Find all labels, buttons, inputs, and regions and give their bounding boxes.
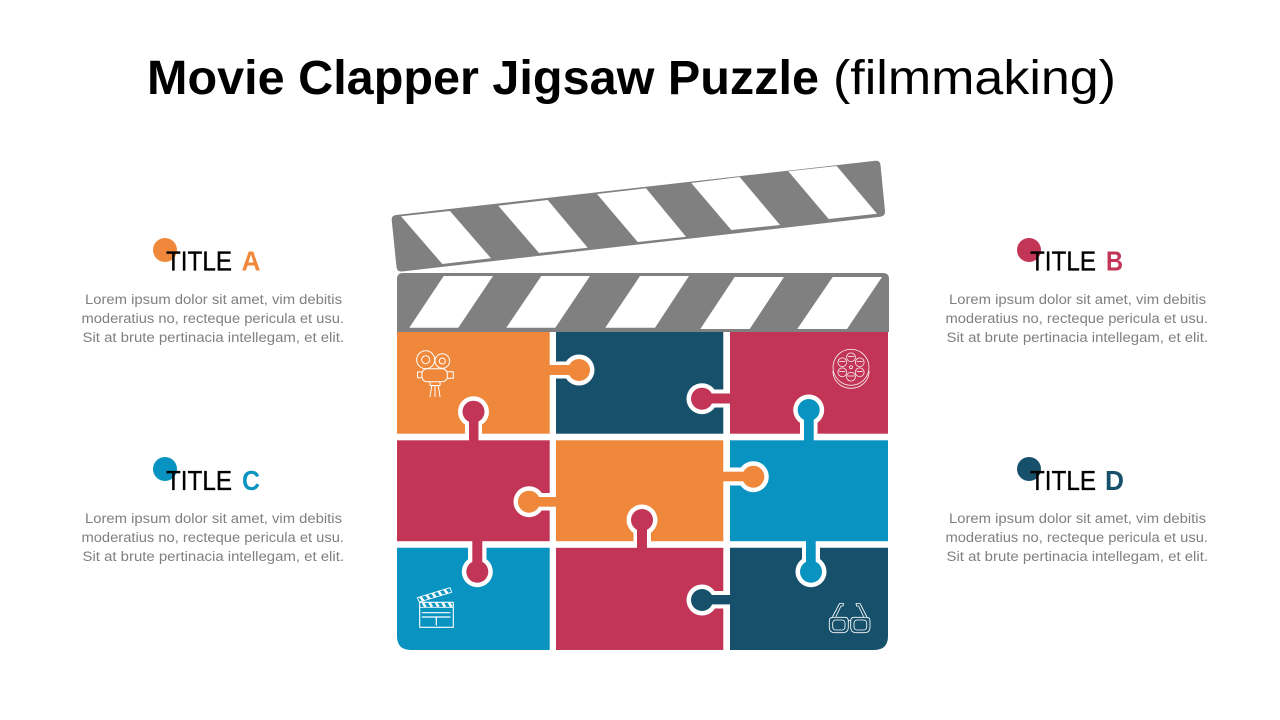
connector: crimson tab into orange	[458, 396, 489, 441]
puzzle piece: row 3 column 3 navy	[730, 548, 888, 650]
puzzle piece: row 1 column 2 navy	[556, 332, 723, 434]
panel: title C	[82, 457, 344, 564]
puzzle piece: row 3 column 1 blue	[397, 548, 550, 650]
heading A: TITLE	[166, 246, 232, 276]
clapper top arm	[392, 161, 885, 272]
jigsaw puzzle board	[397, 332, 888, 650]
puzzle piece: row 3 column 2 crimson	[556, 548, 723, 650]
connector: crimson tab into navy	[686, 383, 731, 414]
body text C	[82, 511, 344, 564]
body text A	[82, 292, 344, 345]
body text A: Sit at brute pertinacia intellegam, et elit.	[82, 330, 344, 345]
title: Movie Clapper Jigsaw Puzzle	[147, 52, 819, 105]
puzzle piece: row 1 column 3 crimson	[730, 332, 888, 434]
heading C: TITLE	[166, 465, 232, 496]
connector: crimson tab into orange centre	[626, 504, 658, 549]
body text C: Lorem ipsum dolor sit amet, vim debitis	[85, 511, 342, 526]
heading A: A	[242, 246, 261, 276]
icon: movie camera	[417, 351, 453, 397]
heading C: C	[242, 465, 260, 496]
connector: blue tab into crimson	[793, 394, 824, 441]
marker dot A	[153, 238, 177, 262]
clapper striped bar	[397, 273, 889, 332]
connector: orange tab into navy	[549, 354, 594, 386]
heading B: TITLE	[1030, 246, 1096, 276]
icon: film reel	[833, 349, 869, 388]
body text A: Lorem ipsum dolor sit amet, vim debitis	[85, 292, 342, 307]
icon: clapperboard	[417, 588, 453, 627]
body text D: Sit at brute pertinacia intellegam, et elit.	[946, 549, 1208, 564]
connector: navy tab into crimson	[686, 584, 731, 616]
puzzle piece: row 2 column 2 orange	[556, 440, 723, 541]
panel: title A	[82, 238, 344, 345]
marker dot D	[1017, 457, 1041, 481]
body text D: Lorem ipsum dolor sit amet, vim debitis	[949, 511, 1206, 526]
marker dot B	[1017, 238, 1041, 262]
connector: orange tab into blue	[723, 461, 769, 492]
panel: title B	[946, 238, 1208, 345]
body text B	[946, 292, 1208, 345]
body text C: moderatius no, recteque pericula et usu.	[82, 530, 344, 545]
heading D: D	[1105, 465, 1124, 496]
connector: orange tab into crimson	[514, 486, 557, 517]
heading B: B	[1106, 246, 1123, 276]
body text B: Sit at brute pertinacia intellegam, et elit.	[946, 330, 1208, 345]
connector: blue tab into navy	[796, 540, 826, 587]
body text D	[946, 511, 1208, 564]
body text D: moderatius no, recteque pericula et usu.	[946, 530, 1208, 545]
puzzle piece: row 1 column 1 orange	[397, 332, 550, 434]
heading D: TITLE	[1030, 465, 1096, 496]
body text C: Sit at brute pertinacia intellegam, et elit.	[82, 549, 344, 564]
marker dot C	[153, 457, 177, 481]
connector: crimson tab into blue	[462, 540, 493, 587]
panel: title D	[946, 457, 1208, 564]
title: (filmmaking)	[833, 52, 1116, 105]
puzzle piece: row 2 column 3 blue	[730, 440, 888, 541]
puzzle piece: row 2 column 1 crimson	[397, 440, 550, 541]
body text A: moderatius no, recteque pericula et usu.	[82, 311, 344, 326]
icon: 3D glasses	[829, 604, 870, 633]
title	[147, 52, 1116, 105]
body text B: Lorem ipsum dolor sit amet, vim debitis	[949, 292, 1206, 307]
body text B: moderatius no, recteque pericula et usu.	[946, 311, 1208, 326]
